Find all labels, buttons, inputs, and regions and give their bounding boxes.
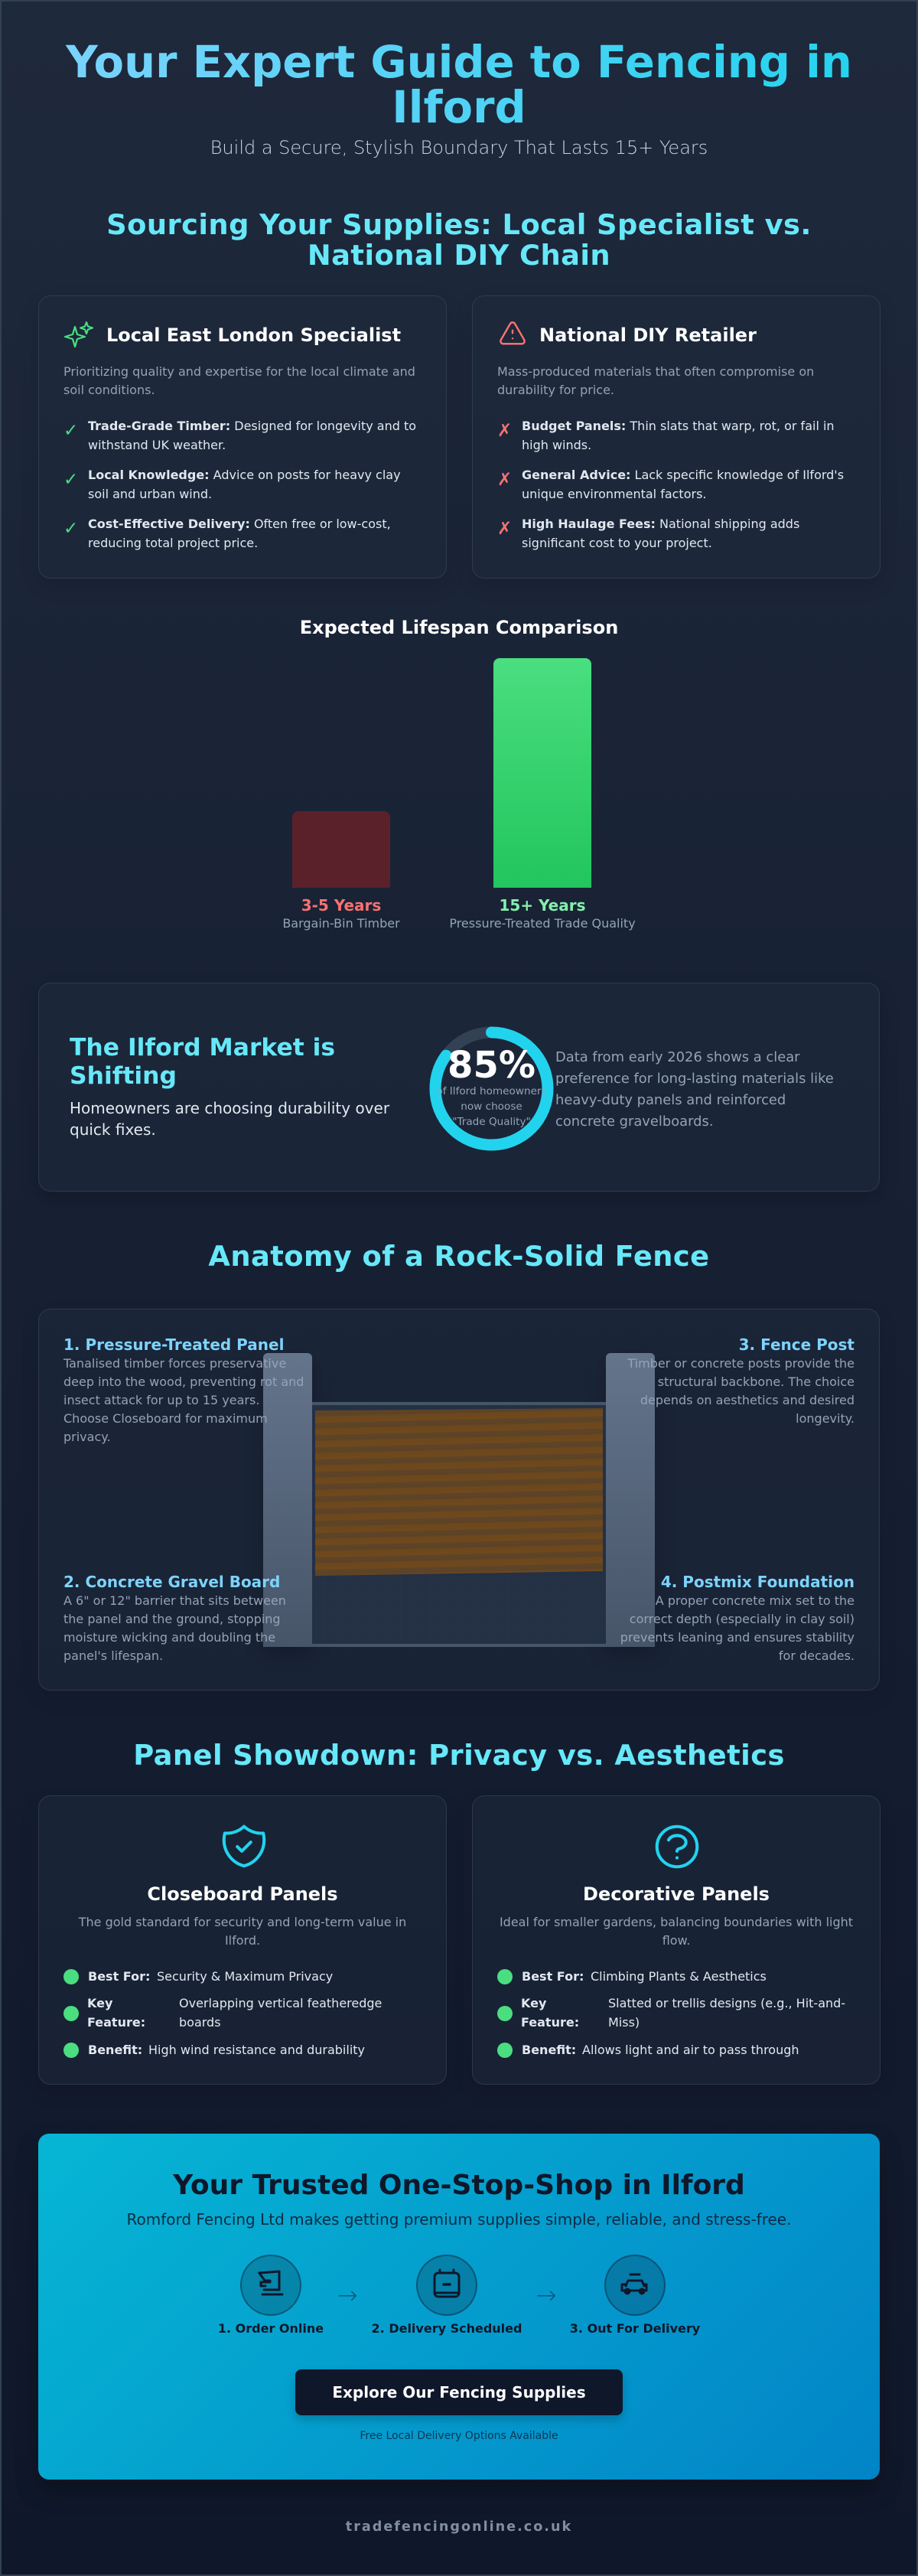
description: soil conditions. (63, 383, 155, 397)
arrow 1: → (337, 2281, 357, 2310)
label 1 text: insect attack for up to 15 years. (63, 1393, 259, 1407)
icon: calendar (433, 2268, 461, 2297)
label 1 text: privacy. (63, 1430, 111, 1444)
diagram: fence cross-section (263, 1353, 655, 1651)
description (63, 364, 415, 397)
label 3 text: structural backbone. The choice (658, 1374, 855, 1389)
panel: fence anatomy (38, 1309, 880, 1691)
label 3 text (627, 1356, 855, 1426)
description (78, 1915, 406, 1948)
section heading: sourcing: Sourcing Your Supplies: Local Specialist vs. (106, 208, 812, 241)
label 4 heading: 4. Postmix Foundation (661, 1573, 855, 1591)
step 2 label: 2. Delivery Scheduled (372, 2321, 522, 2336)
icon: question circle (655, 1824, 699, 1869)
step 1 label: 1. Order Online (218, 2321, 324, 2336)
text: homeowners: Homeowners are choosing durability over (70, 1099, 389, 1117)
label 4 text: A proper concrete mix set to the (656, 1593, 855, 1608)
section heading: panel showdown: Panel Showdown: Privacy vs. Aesthetics (133, 1739, 785, 1772)
section heading: sourcing: National DIY Chain (308, 239, 610, 272)
description: durability for price. (497, 383, 614, 397)
label 4 text: correct depth (especially in clay soil) (630, 1612, 855, 1626)
label 1 text: Choose Closeboard for maximum (63, 1411, 268, 1426)
label 1 heading: 1. Pressure-Treated Panel (63, 1335, 284, 1354)
caption (436, 1085, 547, 1128)
list item: best for (63, 1969, 333, 1984)
subtitle: Build a Secure, Stylish Boundary That Lasts 15+ Years (210, 137, 708, 158)
heading: Closeboard Panels (147, 1883, 338, 1905)
label 4 text: for decades. (779, 1648, 855, 1663)
list item: key feature: Overlapping vertical featheredge (179, 1996, 382, 2010)
list item: high haulage fees: High Haulage Fees: National shipping adds (522, 517, 799, 531)
label: pressure-treated trade quality: Pressure-Treated Trade Quality (449, 916, 636, 931)
list item: budget panels: Budget Panels: Thin slats that warp, rot, or fail in (522, 419, 835, 433)
label 3 text: longevity. (796, 1411, 855, 1426)
list item: cost-effective delivery: reducing total project price. (88, 536, 258, 549)
value: 85% (448, 1044, 536, 1087)
description: flow. (662, 1933, 690, 1948)
label 2 text: A 6" or 12" barrier that sits between (63, 1593, 286, 1608)
icon: scroll (258, 2270, 283, 2296)
text: data note: heavy-duty panels and reinforced (555, 1092, 786, 1108)
icon: sparkles (64, 321, 93, 347)
list item: best for: Best For: (88, 1969, 150, 1984)
list item: cost-effective delivery (63, 517, 391, 549)
label 3 heading: 3. Fence Post (739, 1335, 855, 1354)
list item: key feature: Feature: (87, 2014, 145, 2030)
heading: Local East London Specialist (106, 324, 401, 346)
bar chart: lifespan comparison (282, 617, 636, 931)
list item: high haulage fees: ✗ (497, 519, 512, 539)
list item: benefit: Benefit: (88, 2043, 142, 2057)
description: Prioritizing quality and expertise for the local climate and (63, 364, 415, 379)
list item: best for (497, 1969, 767, 1984)
note: free delivery: Free Local Delivery Options Available (360, 2430, 558, 2442)
description (497, 364, 814, 397)
panel: local specialist (38, 295, 447, 579)
list item: trade-grade timber: ✓ (63, 421, 78, 441)
bar: bargain-bin timber (292, 811, 390, 888)
list item: trade-grade timber (63, 419, 416, 452)
label 2 heading: 2. Concrete Gravel Board (63, 1573, 280, 1591)
chart title: Expected Lifespan Comparison (300, 617, 618, 638)
text: data note: concrete gravelboards. (555, 1114, 714, 1130)
section heading: anatomy: Anatomy of a Rock-Solid Fence (208, 1240, 710, 1273)
right post (606, 1353, 655, 1647)
list item: key feature (497, 1996, 845, 2030)
text: data note: preference for long-lasting materials like (555, 1071, 834, 1087)
list item: general advice (497, 468, 844, 501)
icon: delivery vehicle (621, 2273, 647, 2294)
label 1 text (63, 1356, 304, 1444)
list item: benefit: Benefit: (522, 2043, 576, 2057)
bar: pressure-treated (493, 658, 591, 888)
fence panel boards (315, 1408, 603, 1576)
list item: key feature: Slatted or trellis designs (e.g., Hit-and- (608, 1996, 845, 2010)
text: data note: Data from early 2026 shows a clear (555, 1049, 800, 1065)
label 2 text: moisture wicking and doubling the (63, 1630, 275, 1645)
list item: budget panels (497, 419, 835, 452)
caption: "Trade Quality" (452, 1116, 531, 1128)
panel: national retailer (472, 295, 881, 579)
list item: local knowledge: ✓ (63, 470, 78, 490)
list item: local knowledge (63, 468, 401, 501)
label: bargain-bin timber: Bargain-Bin Timber (282, 916, 400, 931)
list item: benefit: Allows light and air to pass through (582, 2043, 799, 2057)
label 3 text: depends on aesthetics and desired (640, 1393, 855, 1407)
label 4 text: prevents leaning and ensures stability (620, 1630, 855, 1645)
list item: high haulage fees: significant cost to your project. (522, 536, 712, 549)
description (500, 1915, 853, 1948)
heading: Shifting (70, 1062, 177, 1090)
list item: cost-effective delivery: ✓ (63, 519, 78, 539)
list item: key feature: Key (87, 1996, 112, 2010)
label 2 text (63, 1593, 286, 1663)
list item: high haulage fees (497, 517, 799, 549)
list item: benefit: High wind resistance and durability (148, 2043, 365, 2057)
label 3 text: Timber or concrete posts provide the (627, 1356, 855, 1371)
list item: best for: Best For: (522, 1969, 584, 1984)
list item: local knowledge: Local Knowledge: Advice on posts for heavy clay (88, 468, 401, 482)
list item: general advice: ✗ (497, 470, 512, 490)
description: Ideal for smaller gardens, balancing boundaries with light (500, 1915, 853, 1929)
list item: trade-grade timber: withstand UK weather. (88, 438, 226, 452)
label 2 text: panel's lifespan. (63, 1648, 163, 1663)
description: The gold standard for security and long-term value in (79, 1915, 406, 1929)
button: Explore Our Fencing Supplies (332, 2383, 586, 2402)
text: homeowners: quick fixes. (70, 1120, 156, 1139)
caption: now choose (461, 1101, 522, 1113)
list item: budget panels: ✗ (497, 421, 512, 441)
label 1 text: deep into the wood, preventing rot and (63, 1374, 304, 1389)
left post (263, 1353, 312, 1647)
list item: best for: Security & Maximum Privacy (157, 1969, 333, 1984)
list item: key feature: Miss) (608, 2014, 640, 2030)
list item: general advice: General Advice: Lack specific knowledge of Ilford's (522, 468, 844, 482)
panel: decorative (472, 1795, 881, 2085)
heading: Your Trusted One-Stop-Shop in Ilford (173, 2170, 745, 2201)
heading: The Ilford Market is (70, 1034, 335, 1061)
list item: key feature (63, 1996, 382, 2030)
heading: National DIY Retailer (539, 324, 757, 346)
donut chart: 85 percent (430, 1027, 554, 1151)
arrow 2: → (536, 2281, 556, 2310)
list item: budget panels: high winds. (522, 438, 591, 452)
label 2 text: the panel and the ground, stopping (63, 1612, 281, 1626)
heading (70, 1034, 335, 1090)
list item: key feature: boards (179, 2014, 221, 2030)
subheading: Romford Fencing Ltd makes getting premium supplies simple, reliable, and stress-free. (127, 2210, 791, 2229)
description: Ilford. (225, 1933, 260, 1948)
panel: market shift (38, 983, 880, 1192)
button (295, 2369, 623, 2415)
title: Ilford (392, 82, 526, 133)
label 1 text: Tanalised timber forces preservative (63, 1356, 286, 1371)
list item: cost-effective delivery: Cost-Effective Delivery: Often free or low-cost, (88, 517, 391, 531)
step 2 circle (416, 2255, 477, 2316)
title: Your Expert Guide to Fencing in (66, 37, 852, 88)
title (38, 40, 880, 130)
description: Mass-produced materials that often compromise on (497, 364, 814, 379)
list item: benefit (497, 2043, 799, 2058)
section heading: sourcing (106, 208, 812, 272)
text: homeowners (70, 1099, 390, 1139)
label 4 text (620, 1593, 855, 1663)
step 3 label: 3. Out For Delivery (570, 2321, 700, 2336)
value: 3-5 years: 3-5 Years (301, 896, 381, 915)
panel: call to action (38, 2134, 880, 2480)
icon: warning triangle (500, 321, 526, 344)
panel: closeboard (38, 1795, 447, 2085)
list item: best for: Climbing Plants & Aesthetics (591, 1969, 767, 1984)
list item: trade-grade timber: Trade-Grade Timber: Designed for longevity and to (88, 419, 416, 433)
footer: tradefencingonline.co.uk (346, 2519, 572, 2535)
heading: Decorative Panels (583, 1883, 770, 1905)
icon: shield check (222, 1824, 266, 1867)
value: 15+ years: 15+ Years (499, 896, 586, 915)
text: data note (555, 1049, 834, 1130)
step 3 circle (604, 2255, 666, 2316)
list item: benefit (63, 2043, 365, 2058)
list item: key feature: Key (521, 1996, 546, 2010)
list item: local knowledge: soil and urban wind. (88, 487, 212, 501)
list item: key feature: Feature: (521, 2014, 579, 2030)
step 1 circle (240, 2255, 301, 2316)
caption: of Ilford homeowners (436, 1085, 547, 1097)
list item: general advice: unique environmental factors. (522, 487, 706, 501)
